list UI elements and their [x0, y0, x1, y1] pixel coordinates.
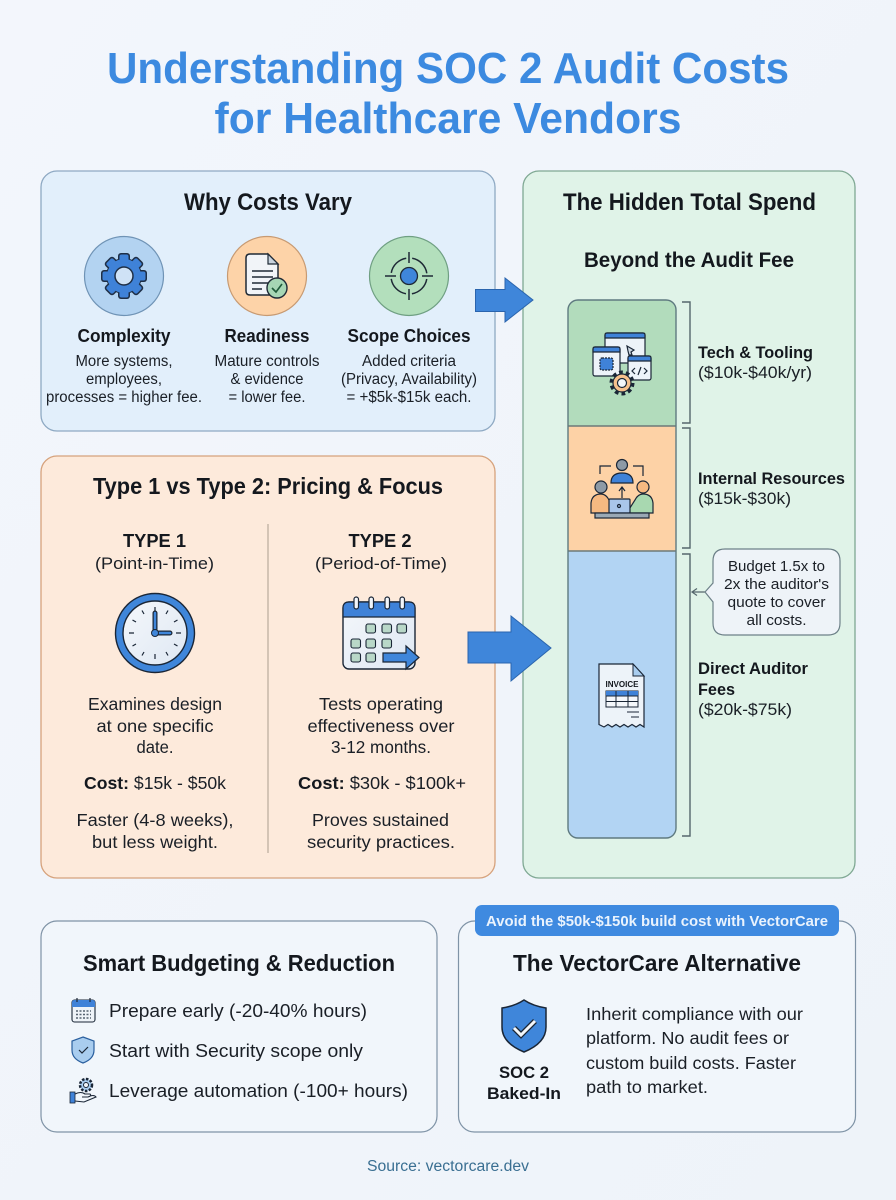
label: tech and tooling: ($10k-$40k/yr)	[698, 363, 812, 382]
column: type 1: TYPE 1	[123, 531, 186, 551]
icon: checked document	[228, 236, 306, 316]
text: alternative description: platform. No audit fees or	[586, 1028, 789, 1048]
heading: smart budgeting: Smart Budgeting & Reduction	[83, 950, 395, 976]
factor: readiness: Readiness	[224, 326, 310, 346]
item: automation: Leverage automation (-100+ hours)	[109, 1080, 408, 1101]
label: direct auditor fees: Direct Auditor	[698, 660, 809, 678]
label: direct auditor fees: Fees	[698, 681, 735, 699]
label: soc 2 baked-in: SOC 2	[499, 1064, 549, 1082]
icon: invoice: INVOICE	[606, 680, 639, 689]
factor: readiness: & evidence	[230, 371, 304, 388]
factor: complexity: Complexity	[78, 326, 170, 346]
factor: complexity: employees,	[86, 371, 162, 388]
column: type 2: (Period-of-Time)	[315, 555, 447, 573]
icon: invoice	[599, 664, 644, 727]
callout: budget multiplier: 2x the auditor's	[724, 576, 829, 593]
label: direct auditor fees	[698, 660, 809, 719]
heading: hidden total spend: The Hidden Total Spend	[563, 189, 816, 216]
text: alternative description: Inherit compliance with our	[586, 1004, 803, 1024]
brackets	[682, 302, 690, 836]
icon: tooling windows	[593, 333, 651, 393]
column: type 2: Cost: $30k - $100k+	[298, 773, 466, 793]
icon: shield badge	[502, 1000, 546, 1052]
factor: complexity	[46, 326, 202, 406]
column: type 1: Cost: $15k - $50k	[84, 773, 226, 793]
column: type 1: Faster (4-8 weeks),	[76, 810, 234, 830]
factor: scope choices	[341, 326, 477, 406]
factor: scope choices: Scope Choices	[348, 326, 470, 346]
label: tech and tooling: Tech & Tooling	[698, 344, 813, 362]
panel: type 1 vs type 2	[41, 456, 495, 878]
text: alternative description	[586, 1004, 803, 1097]
panel: vectorcare alternative	[458, 905, 856, 1132]
icon: team at laptop	[591, 460, 653, 518]
text: alternative description: custom build costs. Faster	[586, 1053, 796, 1073]
label: tech and tooling	[698, 344, 813, 382]
icon: calendar with arrow	[343, 597, 419, 669]
panel: why costs vary	[41, 171, 495, 431]
heading: why costs vary: Why Costs Vary	[184, 189, 353, 216]
factor: readiness: = lower fee.	[228, 389, 306, 406]
label: soc 2 baked-in: Baked-In	[487, 1085, 561, 1103]
column: type 1: but less weight.	[92, 832, 218, 852]
callout: budget multiplier: Budget 1.5x to	[728, 558, 825, 575]
title	[107, 44, 789, 143]
column: type 1: at one specific	[96, 716, 214, 736]
segment: internal resources	[568, 426, 676, 551]
factor: complexity: processes = higher fee.	[46, 389, 202, 406]
column: type 2	[298, 531, 466, 852]
column: type 2: effectiveness over	[308, 716, 455, 736]
icon: gear	[84, 236, 164, 316]
segment: direct auditor fees	[568, 551, 676, 838]
title: Understanding SOC 2 Audit Costs	[107, 44, 789, 93]
factor: scope choices: Added criteria	[362, 353, 456, 370]
column: type 2: Tests operating	[319, 694, 443, 714]
segment: tech and tooling	[568, 300, 676, 426]
arrow: why costs to total spend	[476, 278, 533, 322]
item: prepare early: Prepare early (-20-40% hours)	[109, 1000, 367, 1021]
label: soc 2 baked-in	[487, 1064, 561, 1103]
icon: target	[370, 236, 448, 316]
column: type 2: TYPE 2	[348, 531, 412, 551]
callout: budget multiplier: all costs.	[746, 612, 806, 629]
badge: avoid build cost	[475, 905, 839, 936]
label: internal resources: Internal Resources	[698, 470, 845, 488]
icon: clock	[116, 594, 194, 672]
source: Source: vectorcare.dev	[367, 1158, 529, 1175]
label: internal resources	[698, 470, 845, 508]
factor: readiness	[214, 326, 320, 406]
stacked cost column	[568, 300, 676, 838]
column: type 1	[76, 531, 234, 852]
column: type 2: security practices.	[307, 832, 455, 852]
factor: scope choices: (Privacy, Availability)	[341, 371, 477, 388]
column: type 2: 3-12 months.	[331, 737, 431, 757]
panel: smart budgeting	[41, 921, 437, 1132]
subheading: beyond the audit fee: Beyond the Audit Fee	[584, 249, 794, 272]
heading: type comparison: Type 1 vs Type 2: Pricing & Focus	[93, 473, 443, 499]
arrow: type comparison to total spend	[468, 616, 551, 681]
callout: budget multiplier: quote to cover	[728, 594, 826, 611]
heading: vectorcare alternative: The VectorCare Alternative	[513, 950, 801, 976]
panel: hidden total spend	[523, 171, 855, 878]
callout: budget multiplier	[692, 549, 840, 635]
label: internal resources: ($15k-$30k)	[698, 489, 791, 508]
item: security scope: Start with Security scope only	[109, 1040, 364, 1061]
column: type 1: Examines design	[88, 694, 222, 714]
badge: avoid build cost: Avoid the $50k-$150k build cost with VectorCare	[486, 914, 828, 930]
factor: readiness: Mature controls	[214, 353, 320, 370]
column: type 1: (Point-in-Time)	[95, 555, 214, 573]
factor: scope choices: = +$5k-$15k each.	[346, 389, 472, 406]
title: for Healthcare Vendors	[214, 94, 682, 143]
column: type 1: date.	[136, 737, 174, 757]
item: security scope	[72, 1037, 364, 1063]
factor: complexity: More systems,	[76, 353, 172, 370]
label: direct auditor fees: ($20k-$75k)	[698, 700, 792, 719]
column: type 2: Proves sustained	[312, 810, 449, 830]
text: alternative description: path to market.	[586, 1077, 708, 1097]
